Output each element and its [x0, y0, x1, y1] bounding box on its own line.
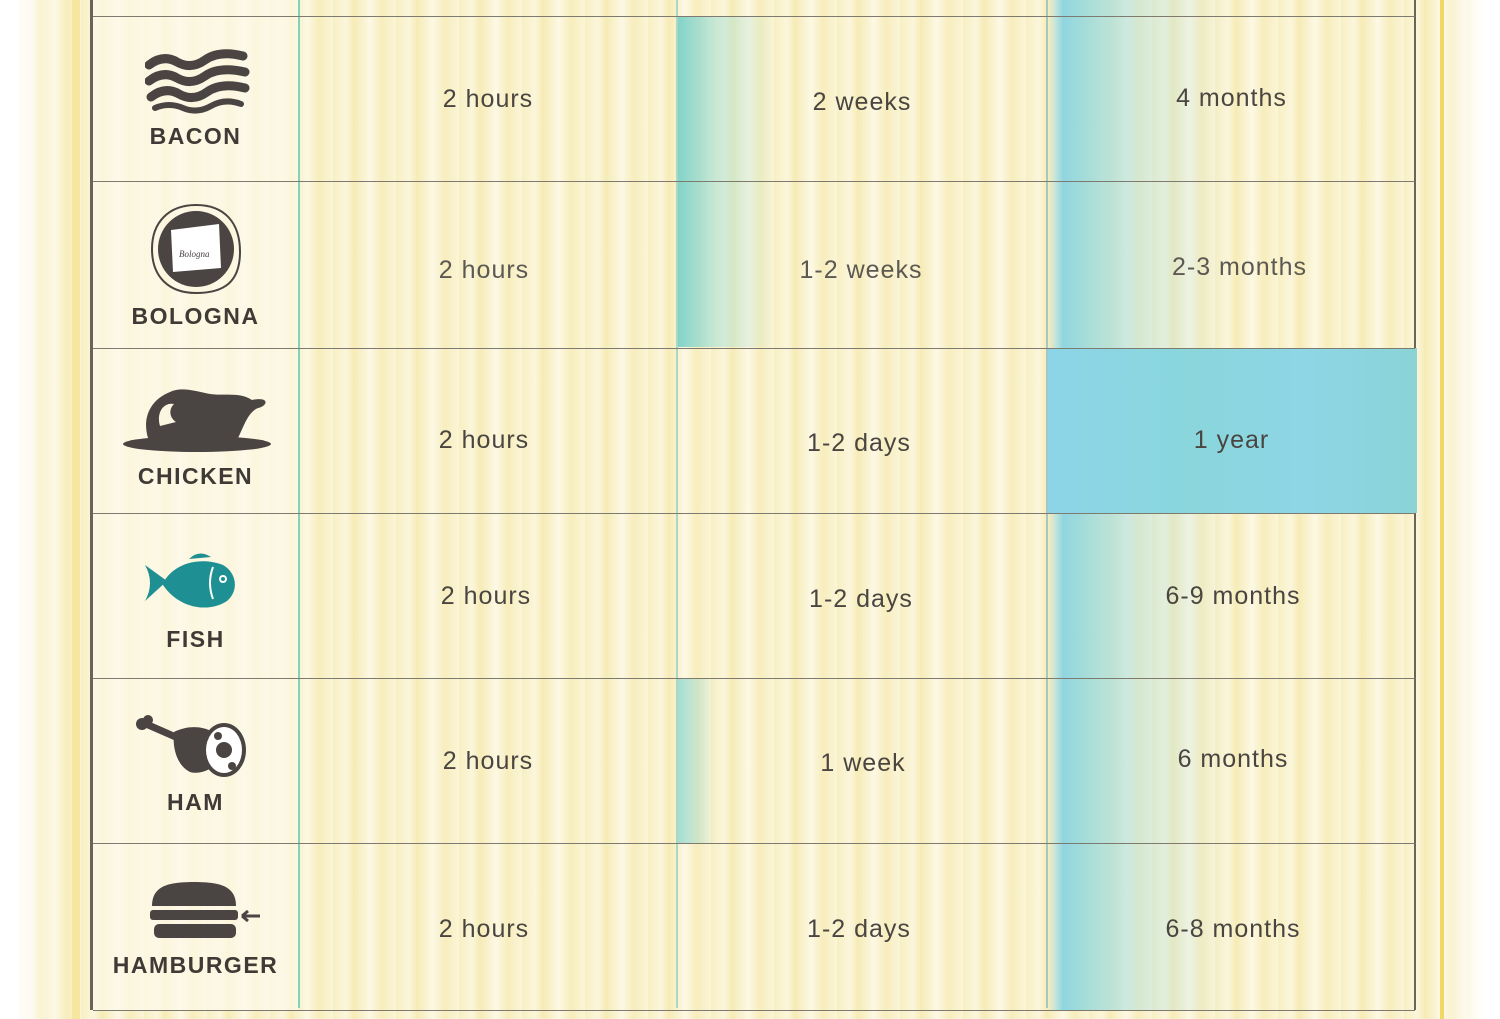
- icon: chicken: [123, 389, 271, 452]
- text: 1 week: [820, 749, 906, 777]
- icon: hamburger: [150, 882, 260, 938]
- label: ham: HAM: [167, 789, 224, 815]
- icon: bacon: [145, 49, 250, 114]
- text: 2 hours: [439, 256, 529, 284]
- table values: 2 hours: [443, 84, 533, 112]
- text: 2 weeks: [813, 88, 911, 116]
- text: 1-2 weeks: [800, 256, 922, 284]
- text: 6 months: [1178, 745, 1288, 773]
- food column background: [93, 0, 298, 1010]
- icon: bologna: [151, 204, 241, 294]
- icon: bologna: Bologna: [179, 249, 210, 259]
- text: 2 hours: [439, 915, 529, 943]
- icon: ham: [136, 715, 246, 777]
- icon: fish: [145, 554, 235, 608]
- text: 2-3 months: [1172, 252, 1307, 280]
- text: 1 year: [1194, 426, 1269, 454]
- label: chicken: CHICKEN: [138, 463, 253, 489]
- label: bologna: BOLOGNA: [131, 303, 260, 329]
- text: 1-2 days: [807, 915, 911, 943]
- text: 1-2 days: [807, 429, 911, 457]
- label: hamburger: HAMBURGER: [113, 952, 278, 978]
- label: fish: FISH: [166, 626, 225, 652]
- row lines: [93, 16, 1415, 17]
- text: 2 hours: [441, 582, 531, 610]
- text: 4 months: [1176, 84, 1287, 112]
- text: 2 hours: [443, 747, 533, 775]
- freezer column tints: [1048, 0, 1417, 1010]
- text: 6-8 months: [1165, 915, 1301, 943]
- text: 1-2 days: [809, 585, 913, 613]
- text: 6-9 months: [1165, 582, 1301, 610]
- text: 2 hours: [439, 426, 529, 454]
- label: bacon: BACON: [150, 123, 241, 149]
- fridge column tints: [676, 16, 1046, 347]
